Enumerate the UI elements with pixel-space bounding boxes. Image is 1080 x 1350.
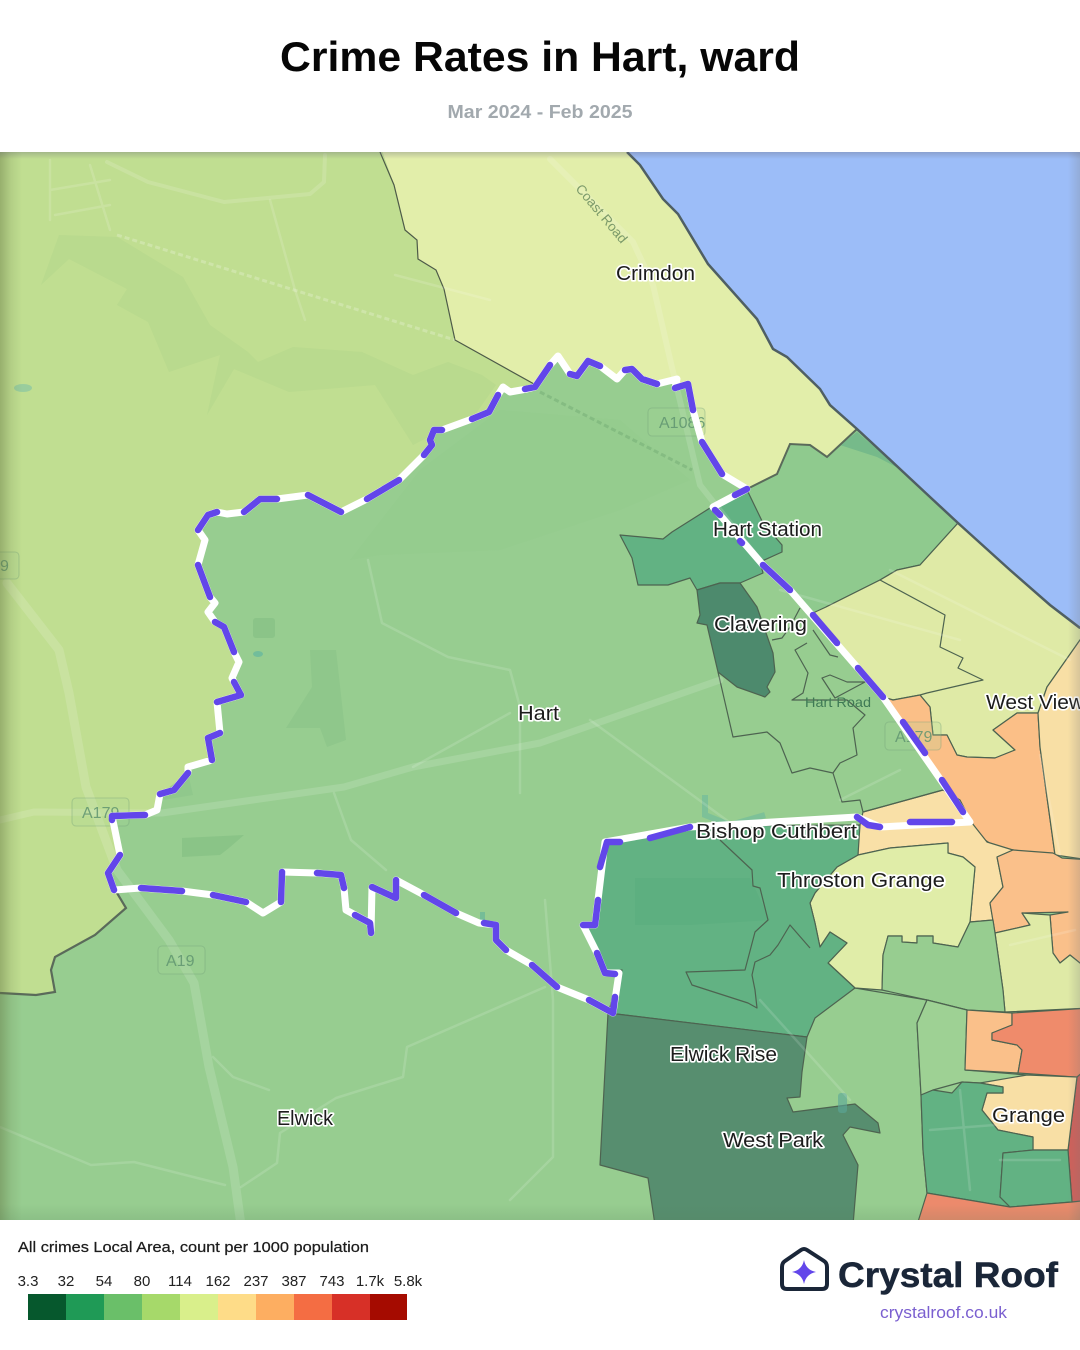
label: Elwick: Elwick: [277, 1108, 334, 1130]
boundary: white line: [108, 356, 970, 1013]
area: Bishop Cuthbert internal lines: [686, 840, 810, 1008]
area: pale green east: [995, 913, 1080, 1012]
area: south of Throston Grange: [882, 920, 1005, 1012]
road shield: A19: [158, 946, 205, 974]
area: Crimdon: [380, 145, 857, 489]
website url: crystalroof.co.uk: [880, 1304, 1008, 1322]
area: red strip: [1068, 1074, 1080, 1202]
wordmark: Crystal Roof: [838, 1256, 1058, 1295]
area: orange block: [965, 1010, 1022, 1073]
legend colour scale: [28, 1294, 407, 1320]
road label: Hart Road: Hart Road: [805, 694, 871, 710]
area: West View orange: [883, 695, 1055, 855]
area: coastal neighbourhood: [813, 523, 1080, 758]
area: Clavering: [697, 583, 775, 697]
line: Crimdon west boundary: [380, 152, 534, 384]
legend values: 54: [96, 1273, 112, 1290]
railway line: [117, 235, 455, 340]
label: West Park: West Park: [723, 1130, 824, 1152]
label: West View: West View: [986, 692, 1080, 714]
icon: house with star: [782, 1249, 827, 1289]
title: Crime Rates in Hart, ward: [280, 33, 800, 80]
legend values: 5.8k: [394, 1273, 423, 1290]
legend values: 80: [134, 1273, 150, 1290]
road shield: A179 west: A179: [82, 805, 119, 822]
area: Grange: [980, 1075, 1077, 1150]
patch: shading in western green: [635, 878, 770, 925]
patch: small ponds: [14, 384, 32, 392]
label: Grange: Grange: [992, 1105, 1065, 1127]
legend values: 32: [58, 1273, 74, 1290]
logo: Crystal Roof: [782, 1249, 1058, 1322]
area: Throston Grange: [810, 843, 975, 990]
area: bottom red band: [918, 1192, 1080, 1220]
label: Throston Grange: Throston Grange: [777, 870, 945, 892]
road shield: A1086: [648, 408, 705, 436]
patch: water spot: [838, 1093, 847, 1113]
area: orange east: [990, 850, 1080, 970]
area: western rural neighbourhood: [0, 145, 534, 995]
area: south central lines: [855, 988, 967, 1193]
road shield: A1086: A1086: [659, 415, 705, 432]
label: Elwick Rise: Elwick Rise: [670, 1044, 777, 1066]
legend values: 237: [243, 1273, 269, 1290]
boundary: purple dashes: [108, 361, 963, 1013]
map base: Hart and Elwick area: [0, 152, 1080, 1220]
area: far east pale: [1038, 630, 1080, 860]
area: green south of Grange: [921, 1082, 1033, 1207]
label: Bishop Cuthbert: Bishop Cuthbert: [696, 821, 857, 843]
ward boundary: Hart: [108, 356, 970, 1013]
patch: water channel: [705, 795, 765, 825]
area: Bishop Cuthbert green: [583, 825, 860, 1037]
legend values: [18, 1273, 423, 1290]
label: Hart: Hart: [518, 703, 559, 725]
subtitle: date range: Mar 2024 - Feb 2025: [448, 101, 632, 122]
label: Hart Station: Hart Station: [713, 519, 822, 541]
line: south-west boundary: [0, 893, 126, 995]
line: Crimdon south boundary: [747, 429, 857, 489]
patch: teal strip at coast: [841, 432, 896, 466]
road shield: A179 east: [885, 722, 941, 750]
coastline: [627, 152, 1080, 628]
area: south east band: [917, 1000, 1027, 1095]
legend values: 387: [281, 1273, 307, 1290]
label: Clavering: Clavering: [714, 614, 807, 636]
area: pale centre: [858, 790, 1013, 922]
area: red-orange block: [992, 1008, 1080, 1078]
legend title: All crimes Local Area, count per 1000 population: [18, 1239, 369, 1256]
legend values: 162: [205, 1273, 231, 1290]
legend: [18, 1239, 423, 1320]
map edge fade: [0, 152, 1080, 1220]
line: east of Hart Station south boundary: [826, 524, 957, 606]
legend values: 743: [319, 1273, 345, 1290]
road shield: A19: A19: [166, 953, 195, 970]
road shield: A19 at left edge: 9: [0, 558, 9, 575]
area: east of Hart Station: [768, 554, 780, 562]
choropleth map: [0, 145, 1080, 1225]
area: Hart Station green: [620, 492, 782, 590]
place labels: [277, 263, 1080, 1152]
legend values: 114: [168, 1273, 192, 1290]
area: Elwick Rise and West Park: [600, 1013, 880, 1225]
sea: [622, 145, 1080, 640]
land patches and shading: [14, 384, 765, 922]
road shield: A179 east: A179: [895, 729, 932, 746]
label: Crimdon: Crimdon: [616, 263, 695, 285]
patch: winding darker valley in western area: [41, 235, 496, 445]
area: West View lines: [880, 580, 983, 695]
patch: darker Hart fields: [294, 688, 344, 744]
area: green block: [1000, 1150, 1072, 1207]
road shield: A179 west: [72, 798, 129, 826]
area: Hart Road lines: [718, 608, 943, 812]
legend values: 3.3: [18, 1273, 38, 1290]
roads: [0, 155, 1075, 1225]
legend values: 1.7k: [356, 1273, 385, 1290]
road shield: A19 at left edge: [0, 552, 19, 579]
road label: Coast Road: Coast Road: [573, 181, 630, 246]
